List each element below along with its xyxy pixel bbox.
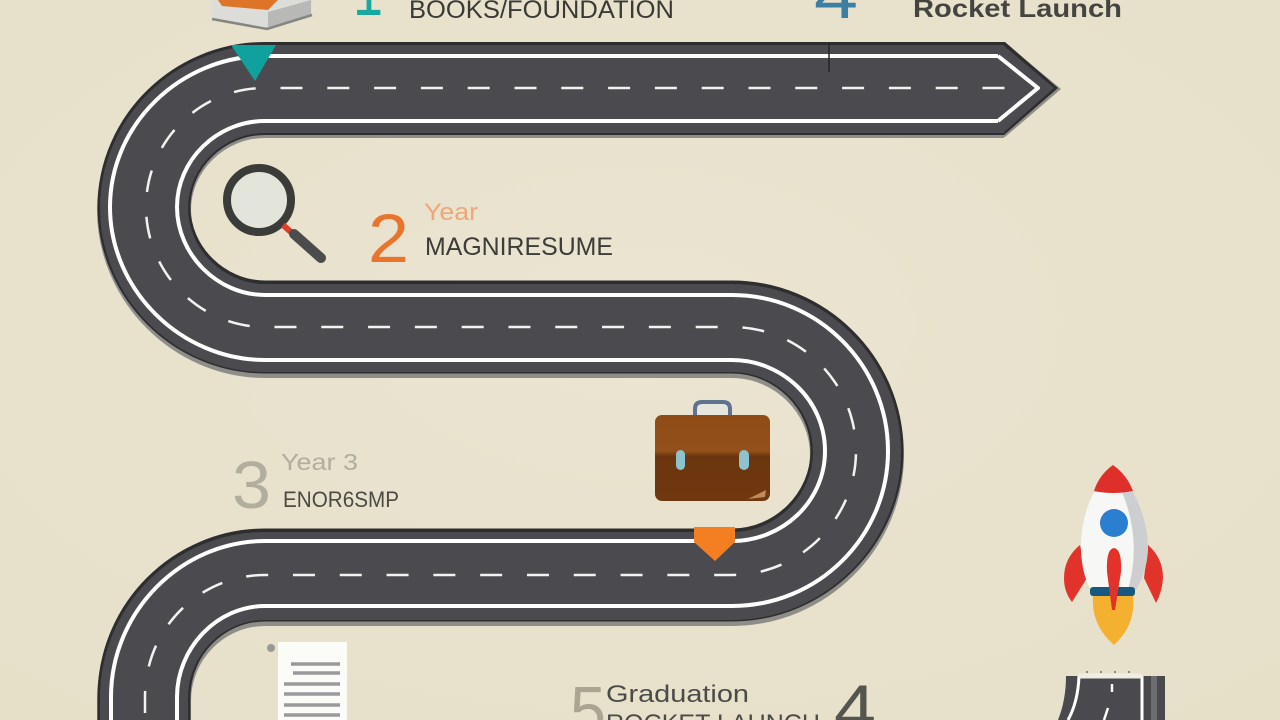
step 3 label: ENOR6SMP — [283, 487, 399, 512]
icon: document — [267, 642, 347, 720]
road arrow head surface — [1000, 45, 1054, 133]
icon: books — [212, 0, 312, 29]
step 3 marker — [694, 527, 735, 561]
icon: road end piece — [1058, 672, 1165, 720]
road arrow head shadow — [1000, 43, 1061, 137]
step 2 number: 2 — [368, 200, 409, 277]
winding road — [110, 42, 1061, 720]
road shadow — [144, 91, 1004, 720]
step 2 year: Year — [424, 199, 478, 226]
road edge lines — [110, 56, 1038, 720]
road surface — [144, 89, 1004, 720]
road centre dashes — [145, 88, 1004, 720]
step 5 graduation label: Graduation — [606, 681, 749, 708]
icon: magnifying glass — [227, 168, 321, 258]
step 2 label: MAGNIRESUME — [425, 233, 613, 261]
road dark edge — [144, 88, 1004, 720]
step 3 number: 3 — [232, 448, 271, 523]
step 3 year: Year 3 — [281, 449, 358, 475]
road arrow head edge — [1000, 42, 1058, 135]
icon: rocket — [1064, 465, 1163, 645]
icon: briefcase — [655, 402, 770, 501]
step 1 marker — [231, 45, 276, 81]
